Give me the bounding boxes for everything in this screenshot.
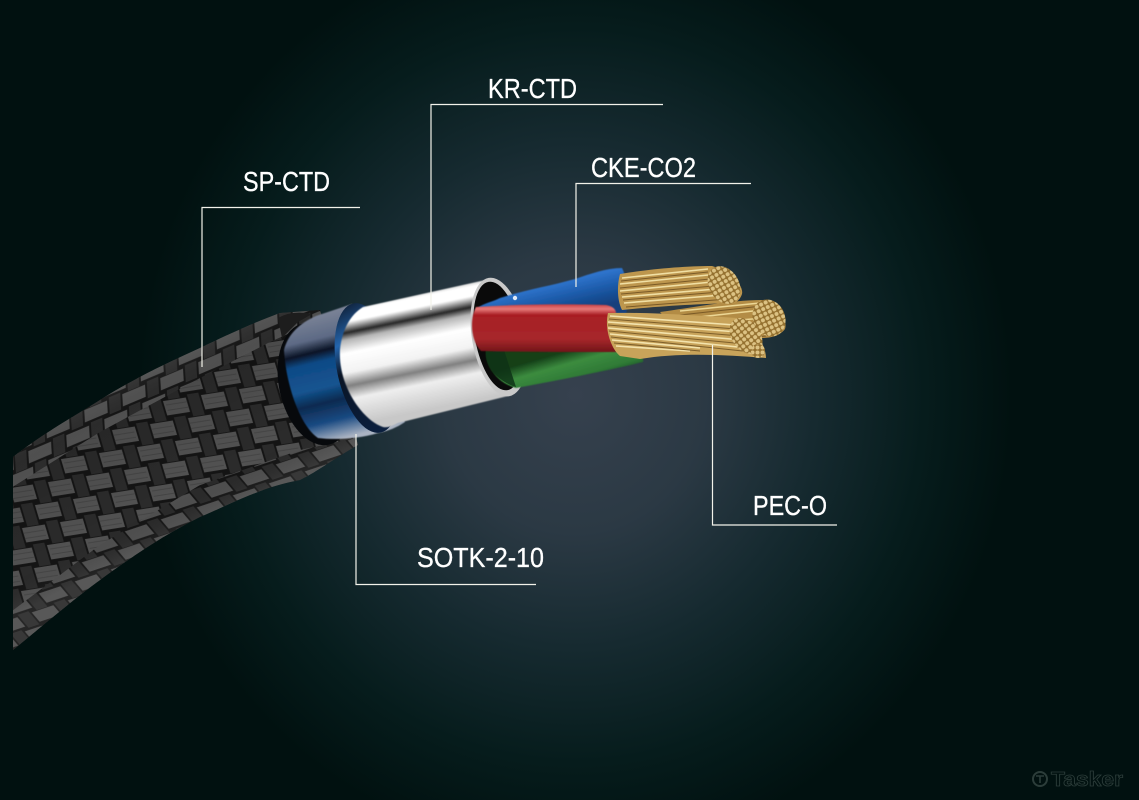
watermark: Tasker: Tasker xyxy=(1051,769,1123,791)
leader line: CKE-CO2 xyxy=(576,184,751,287)
leader line: KR-CTD xyxy=(431,104,663,310)
watermark: Tasker xyxy=(1033,769,1123,791)
sleeve rim xyxy=(462,273,536,401)
braided cable sleeve xyxy=(13,310,358,650)
copper strands: front bundle xyxy=(607,312,769,360)
label: CKE-CO2: CKE-CO2 xyxy=(591,152,696,183)
label: PEC-O: PEC-O xyxy=(753,490,827,521)
copper strands: top bundle xyxy=(618,260,747,310)
blue metal collar xyxy=(284,297,410,439)
red wire xyxy=(472,304,617,352)
label: SP-CTD: SP-CTD xyxy=(243,166,330,197)
blue wire xyxy=(476,268,628,325)
leader line: SP-CTD xyxy=(202,208,360,367)
leader line: PEC-O xyxy=(712,345,837,525)
silver metal sleeve xyxy=(340,273,536,427)
dark end cap of braid xyxy=(267,313,365,452)
copper strands: rear bundle xyxy=(660,294,792,345)
label: KR-CTD: KR-CTD xyxy=(488,73,577,104)
leader line: SOTK-2-10 xyxy=(356,434,536,584)
green wire xyxy=(486,350,643,388)
label: SOTK-2-10: SOTK-2-10 xyxy=(417,542,544,573)
